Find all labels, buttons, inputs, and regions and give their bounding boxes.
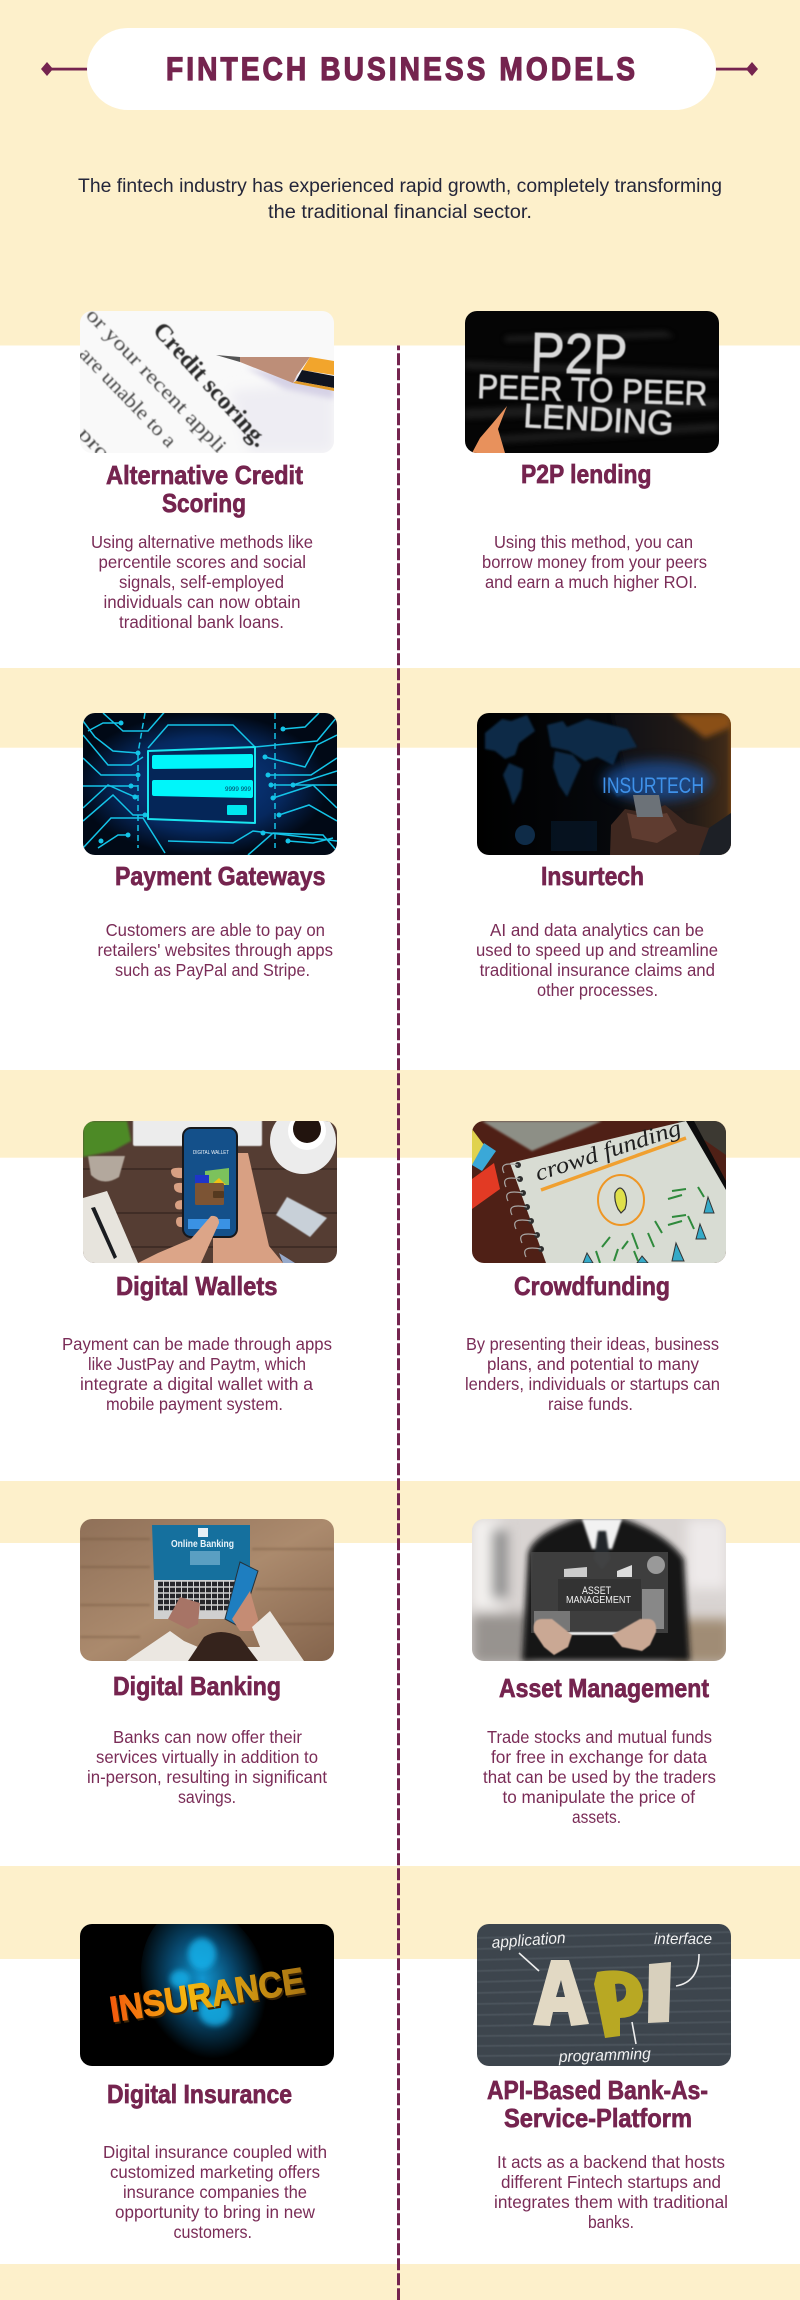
description (494, 2152, 728, 2232)
heading (106, 460, 303, 518)
description: that can be used by the traders (483, 1767, 716, 1787)
image: credit scoring paper and pencil (80, 311, 334, 453)
panel: digital insurance (80, 1924, 334, 2238)
title banner (41, 28, 758, 110)
image: api wooden letters: programming (558, 2046, 651, 2066)
panel: digital banking (80, 1519, 334, 1807)
image: phone digital wallet on desk (83, 1108, 337, 1263)
image: insurtech world map and phone: INSURTECH (602, 773, 704, 798)
description: traditional bank loans. (119, 612, 284, 632)
image: credit scoring paper and pencil: or your recent appli (81, 304, 231, 458)
description: in-person, resulting in significant (87, 1767, 327, 1787)
image: online banking laptop: Online Banking (171, 1538, 234, 1550)
heading: P2P lending (521, 459, 652, 489)
description: insurance companies the (123, 2182, 307, 2202)
image: crowdfunding notebook sketch (472, 1115, 726, 1263)
heading: Service-Platform (504, 2103, 692, 2133)
intro text: The fintech industry has experienced rapid growth, completely transforming (78, 176, 722, 197)
description (482, 532, 707, 592)
description: mobile payment system. (106, 1394, 283, 1414)
description: opportunity to bring in new (115, 2202, 315, 2222)
image: api wooden letters: application (491, 1930, 566, 1952)
description (91, 532, 313, 632)
intro text (78, 176, 722, 223)
image: api wooden letters (477, 1924, 731, 2066)
description: Digital insurance coupled with (103, 2142, 327, 2162)
image: credit scoring paper and pencil: Credit scoring. (148, 318, 273, 452)
description: customers. (174, 2222, 252, 2242)
description: used to speed up and streamline (476, 940, 718, 960)
panel: asset management (472, 1519, 732, 1827)
header cream band (0, 0, 800, 346)
description: percentile scores and social (98, 552, 306, 572)
image: api wooden letters: interface (654, 1931, 712, 1948)
image: credit scoring paper and pencil: are unable to a (74, 343, 181, 452)
heading: API-Based Bank-As- (487, 2075, 708, 2105)
description: such as PayPal and Stripe. (115, 960, 310, 980)
intro text: the traditional financial sector. (268, 202, 532, 223)
panel: payment gateways (83, 708, 337, 980)
panel: alternative credit scoring (73, 304, 334, 632)
description: It acts as a backend that hosts (497, 2152, 725, 2172)
description: lenders, individuals or startups can (465, 1374, 720, 1394)
description: signals, self-employed (119, 572, 284, 592)
description: different Fintech startups and (501, 2172, 721, 2192)
left connector with diamond (41, 62, 89, 76)
cream band row 2 (0, 668, 800, 748)
image: insurance 3d word: INSURANCE (108, 1961, 308, 2032)
title pill (87, 28, 716, 110)
description: traditional insurance claims and (480, 960, 715, 980)
image: asset management businessman: MANAGEMENT (566, 1595, 631, 1606)
image: crowdfunding notebook sketch: crowd funding (532, 1115, 684, 1186)
heading: Digital Insurance (107, 2079, 292, 2109)
description: raise funds. (548, 1394, 633, 1414)
description: By presenting their ideas, business (466, 1334, 719, 1354)
heading: Digital Wallets (116, 1271, 278, 1301)
panel: api-based bank-as-service platform (477, 1924, 731, 2232)
description: retailers' websites through apps (98, 940, 333, 960)
image: phone digital wallet on desk: DIGITAL WALLET (193, 1150, 229, 1156)
cream band row 4 (0, 1481, 800, 1543)
description: Banks can now offer their (113, 1727, 302, 1747)
panel: digital wallets (62, 1108, 337, 1414)
image: insurance 3d word: INSURANCE (107, 1959, 307, 2030)
description: Customers are able to pay on (106, 920, 325, 940)
heading: Payment Gateways (115, 861, 326, 891)
description: borrow money from your peers (482, 552, 707, 572)
image: p2p chalkboard: P2P (530, 321, 628, 388)
description: for free in exchange for data (491, 1747, 707, 1767)
description (103, 2142, 327, 2242)
image: insurance 3d word (80, 1924, 334, 2066)
image: online banking laptop (80, 1519, 334, 1661)
description: AI and data analytics can be (490, 920, 704, 940)
description: assets. (572, 1807, 621, 1827)
description: Using this method, you can (494, 532, 693, 552)
heading: Insurtech (541, 861, 644, 891)
description: integrate a digital wallet with a (80, 1374, 313, 1394)
panel: crowdfunding (465, 1115, 726, 1414)
image: p2p chalkboard: LENDING (523, 397, 674, 443)
center dashed divider (397, 346, 400, 2300)
right connector with diamond (714, 62, 758, 76)
description (98, 920, 333, 980)
heading: Crowdfunding (514, 1271, 670, 1301)
description: like JustPay and Paytm, which (88, 1354, 306, 1374)
image: insurtech world map and phone (477, 713, 731, 855)
description (87, 1727, 327, 1807)
image: circuit payment form: 9999 999 (225, 786, 251, 793)
description: and earn a much higher ROI. (485, 572, 698, 592)
description: individuals can now obtain (104, 592, 300, 612)
heading: Digital Banking (113, 1671, 281, 1701)
cream band row 5 (0, 1866, 800, 1959)
panel: p2p lending (465, 311, 719, 592)
description: other processes. (537, 980, 658, 1000)
cream band row 3 (0, 1070, 800, 1158)
image: asset management businessman (472, 1519, 732, 1664)
image: p2p chalkboard: PEER TO PEER (477, 368, 708, 413)
cream band footer (0, 2264, 800, 2300)
description: Trade stocks and mutual funds (487, 1727, 712, 1747)
description (483, 1727, 716, 1827)
description: savings. (178, 1787, 236, 1807)
description (62, 1334, 332, 1414)
image: circuit payment form (83, 708, 337, 855)
description (465, 1334, 720, 1414)
description: Payment can be made through apps (62, 1334, 332, 1354)
description (476, 920, 718, 1000)
heading: Scoring (162, 488, 246, 518)
title: FINTECH BUSINESS MODELS (166, 52, 635, 87)
description: banks. (588, 2212, 634, 2232)
image: credit scoring paper and pencil: pro (73, 423, 114, 464)
description: to manipulate the price of (502, 1787, 695, 1807)
heading: Asset Management (499, 1673, 709, 1703)
image: asset management businessman: ASSET (582, 1585, 611, 1597)
description: services virtually in addition to (96, 1747, 318, 1767)
description: customized marketing offers (110, 2162, 320, 2182)
panel: insurtech (476, 713, 731, 1000)
description: plans, and potential to many (487, 1354, 699, 1374)
description: integrates them with traditional (494, 2192, 728, 2212)
description: Using alternative methods like (91, 532, 313, 552)
heading: Alternative Credit (106, 460, 303, 490)
image: p2p chalkboard (465, 311, 719, 453)
heading (487, 2075, 708, 2133)
